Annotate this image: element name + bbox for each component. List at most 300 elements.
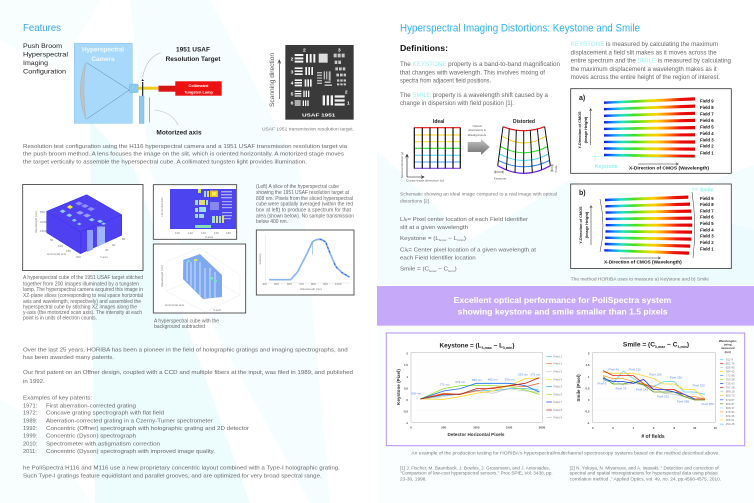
colour rows bbox=[414, 128, 460, 168]
legend header bbox=[719, 339, 737, 354]
legend rows: 475.84 bbox=[726, 410, 735, 414]
legend rows: 253.45 bbox=[726, 422, 735, 426]
text: HORIBA history: Our first patent on an Offner design, coupled with a CCD and multiple fibers at the input, was filed in 1989, and published bbox=[23, 370, 353, 376]
text: slice description: showing the 1951 USAF resolution target at bbox=[256, 190, 350, 196]
cube axis labels: 100 bbox=[58, 244, 63, 248]
keystone label: Keystone bbox=[494, 177, 507, 181]
y axis arrow bbox=[590, 108, 592, 145]
text: cube description: point is in units of electron counts. bbox=[23, 316, 97, 322]
diagram: distorted grid bbox=[494, 119, 558, 181]
reference 1: "Comparison of low-cost hyperspectral sensors," Proc SPIE, Vol. 3438, pp. bbox=[400, 471, 553, 476]
legend: Field 7 bbox=[554, 400, 563, 404]
text: smile formula: Cλᵢ= Center pixel location of a given wavelength at bbox=[400, 248, 536, 254]
text: PoliSpectra gratings: Such Type-I gratings feature equidistant and parallel grooves, and are optimized for very broad spectral range. bbox=[23, 473, 322, 479]
heading: push broom configuration bbox=[23, 43, 68, 75]
field labels: Field 1 bbox=[700, 246, 714, 251]
chart title: Keystone = (L bbox=[439, 342, 482, 350]
y ticks: 0 bbox=[406, 398, 408, 402]
legend rows: 753.58 bbox=[726, 378, 735, 382]
legend: Field 3 bbox=[554, 370, 563, 374]
y axis label bbox=[578, 111, 588, 149]
heading: push broom configuration: Hyperspectral bbox=[23, 52, 68, 59]
panel: hyperspectral cube bbox=[23, 184, 143, 270]
y ticks: 1 bbox=[588, 375, 590, 379]
lamp box bbox=[175, 81, 222, 96]
axis labels: 700 bbox=[299, 282, 304, 286]
legend rows: 826.45 bbox=[726, 365, 735, 369]
lens bbox=[129, 84, 138, 93]
y ticks: 1 bbox=[406, 375, 408, 379]
legend header: measured bbox=[721, 346, 735, 350]
text: slice description bbox=[256, 184, 354, 225]
motion arrow bbox=[148, 98, 150, 122]
text: HORIBA history: Over the last 25 years, HORIBA has been a pioneer in the field of holographic gratings and imaging spectrographs, and bbox=[23, 347, 348, 353]
diagram: distorted grid: Distorted bbox=[513, 119, 535, 125]
text: cube description: A hyperspectral cube of the 1951 USAF target stitched bbox=[23, 275, 143, 281]
y ticks: -1 bbox=[587, 421, 590, 425]
banner: showing keystone and smile smaller than 1.5 pixels bbox=[458, 307, 668, 317]
text: resolution test configuration: Resolution test configuration using the H116 hyperspectral camera and a 1951 USAF transmission resolution target via bbox=[23, 144, 348, 150]
field labels: Field 3 bbox=[700, 234, 714, 239]
text: smile formula: λmax bbox=[429, 269, 437, 273]
text: HORIBA history bbox=[23, 347, 353, 385]
text: smile formula: λmin bbox=[448, 269, 455, 273]
axis labels: 500 bbox=[274, 282, 279, 286]
axis labels: 800 bbox=[311, 282, 316, 286]
plot lines: Pixel 215 bbox=[657, 394, 669, 398]
cube side columns bbox=[87, 230, 93, 252]
legend rows: 912.9 bbox=[726, 357, 733, 361]
plot lines: 295 nm bbox=[518, 373, 528, 377]
image: USAF 1951 target: 2 bbox=[303, 48, 306, 54]
list: key patents: Concentric (Offner) spectrograph with holographic grating and 2D detector bbox=[46, 426, 249, 432]
reference 1: 23-30, 1998. bbox=[400, 476, 427, 481]
slice axes: 140 bbox=[201, 231, 206, 235]
label: motorized axis: Motorized axis bbox=[156, 130, 202, 136]
y ticks: 2 bbox=[588, 352, 590, 356]
legend: Field 9 bbox=[554, 415, 563, 419]
axis labels: X-axis bbox=[213, 308, 222, 312]
legend header: being bbox=[724, 342, 732, 346]
arrow: aberrations: Misalignments bbox=[468, 133, 487, 137]
legend rows: 650.72 bbox=[726, 394, 735, 398]
text: keystone definition: that changes with wavelength. This involves mixing of bbox=[400, 69, 545, 76]
slice image bbox=[170, 189, 236, 229]
caption: production testing: An example of the production testing for HORIBA's hyperspectral/multichannel spectroscopy systems based on the method described above. bbox=[411, 450, 720, 456]
plot lines: Pixel 180 bbox=[649, 373, 662, 377]
slice axes bbox=[160, 197, 231, 239]
y ticks: -0.5 bbox=[403, 410, 408, 414]
cube side column 2 bbox=[97, 226, 105, 247]
text: slice description: area (shown below). No sample transmission bbox=[256, 213, 354, 219]
field labels: Field 2 bbox=[700, 240, 714, 245]
y axis title: Smile (Pixel) bbox=[576, 374, 581, 402]
collimated beam bbox=[138, 87, 159, 90]
cube axis labels: 80 bbox=[122, 237, 126, 241]
image: USAF 1951 target: 4 bbox=[291, 81, 294, 87]
text: keystone formula: ) bbox=[464, 236, 466, 242]
camera label bbox=[82, 46, 124, 63]
y axis arrow bbox=[590, 206, 592, 245]
y ticks bbox=[585, 352, 590, 425]
chart title: ) bbox=[512, 342, 515, 350]
heading: Features: Features bbox=[23, 22, 61, 34]
reference 2: [2] N. Yokoya, N. Miyamura, and A. Iwasaki, " Detection and correction of bbox=[570, 465, 719, 470]
panel: test results bbox=[386, 333, 745, 446]
image: USAF 1951 target: 2 bbox=[291, 57, 294, 63]
text: cube description bbox=[23, 275, 143, 322]
legend rows: 707.28 bbox=[726, 386, 735, 390]
text: slice description: below 400 nm. bbox=[256, 219, 288, 225]
field labels: Field 7 bbox=[700, 111, 714, 116]
grid columns bbox=[414, 128, 460, 168]
x ticks: 10 bbox=[693, 426, 697, 430]
legend: Field 4 bbox=[554, 377, 563, 381]
x axis title: Detector Horizontal Pixels bbox=[448, 432, 505, 437]
x ticks: 8 bbox=[673, 426, 675, 430]
text: cube description: y-axis (the motorized scan axis). The intensity at each bbox=[23, 310, 142, 316]
arrow: aberrations: Optical bbox=[472, 124, 482, 128]
x ticks: 1500 bbox=[506, 426, 513, 430]
field labels: Field 3 bbox=[700, 137, 714, 142]
text: resolution test configuration bbox=[23, 144, 348, 165]
text: keystone definition bbox=[400, 61, 560, 85]
field labels: Field 4 bbox=[700, 131, 714, 136]
icon: spectral and cross-track axes: Spectral direction (y) bbox=[400, 152, 404, 178]
slice axes: X-axis bbox=[205, 235, 214, 239]
motorized stage bbox=[139, 96, 144, 124]
text: resolution test configuration: the target vertically to assemble the hyperspectral cube. A collimated tungsten light provides illumination. bbox=[23, 159, 307, 165]
banner: Excellent optical performance for PoliSpectra system bbox=[454, 295, 671, 305]
plot lines: 485 nm bbox=[488, 377, 498, 381]
text: smile definition: change in dispersion with field position [1]. bbox=[400, 100, 514, 107]
cube axis labels: 1000 bbox=[40, 220, 47, 224]
slice features bbox=[195, 189, 232, 228]
image: USAF 1951 target: 5 bbox=[291, 91, 294, 97]
reference 2 bbox=[570, 465, 721, 481]
camera label: Hyperspectral bbox=[82, 46, 124, 54]
cube axis labels: Y-axis bbox=[100, 255, 108, 259]
text: measurement method: displacement a field slit makes as it moves across the bbox=[571, 49, 717, 56]
field labels: Field 1 bbox=[700, 150, 714, 155]
panel: cube slice bbox=[153, 185, 237, 239]
y ticks: 0 bbox=[588, 398, 590, 402]
caption: background subtracted: A hyperspectral cube with the bbox=[154, 318, 219, 324]
smile marker bbox=[692, 187, 698, 191]
y axis label: (Image Height) bbox=[585, 211, 589, 238]
x ticks: 12 bbox=[714, 426, 717, 430]
scanning direction bbox=[270, 53, 281, 107]
colour curves bbox=[498, 127, 550, 173]
keystone marker bbox=[592, 153, 696, 161]
reference 1: [1] J. Fischer, M. Baumback, J. Bowles, J. Grossmann, and J. Antoniades, bbox=[400, 465, 550, 470]
axis labels: 1000 bbox=[335, 282, 342, 286]
text: keystone formula: Lλᵢ= Pixel center location of each Field Identifier bbox=[400, 217, 528, 223]
leader lines bbox=[143, 53, 178, 125]
plot lines bbox=[593, 353, 715, 422]
list: key patents: Spectrometer with astigmatism correction bbox=[46, 441, 160, 447]
x ticks: 4 bbox=[632, 426, 634, 430]
plot lines: Pixel 110 bbox=[629, 368, 641, 372]
icon: spectral and cross-track axes: Cross-track direction (x) bbox=[406, 178, 444, 182]
text: smile formula: each Field Identifier location bbox=[400, 255, 476, 261]
x ticks: 1000 bbox=[473, 426, 480, 430]
bar gaps bbox=[187, 260, 215, 298]
y ticks: 0.5 bbox=[404, 386, 408, 390]
text: PoliSpectra gratings bbox=[23, 465, 340, 479]
cube axis labels: 40 bbox=[105, 248, 109, 252]
field labels: Field 8 bbox=[700, 105, 714, 110]
legend rows bbox=[720, 357, 735, 426]
caption: schematic: Schematic showing an ideal image compared to a real image with optical bbox=[400, 192, 557, 197]
text: smile definition: The SMILE property is a wavelength shift caused by a bbox=[400, 92, 549, 99]
field labels: Field 5 bbox=[700, 124, 714, 129]
heading: push broom configuration: Configuration bbox=[23, 68, 67, 75]
text: measurement method: moves across the entire height of the region of interest. bbox=[571, 74, 720, 81]
text: resolution test configuration: the push broom method. A lens focuses the image on the slit, which is oriented horizontally. A motorized stage moves bbox=[23, 152, 344, 158]
text: cube description: hyperspectral cube by stitching XZ images along the bbox=[23, 305, 137, 311]
label: 1951 USAF target: 1951 USAF bbox=[176, 46, 210, 54]
chart: keystone bbox=[396, 342, 563, 437]
list: key patents bbox=[23, 395, 249, 455]
plot lines: Pixel 320 bbox=[692, 383, 705, 387]
text: keystone formula bbox=[400, 217, 528, 242]
legend header: Wavelengths bbox=[719, 339, 737, 343]
y ticks: 2 bbox=[406, 352, 408, 356]
x ticks: 0 bbox=[592, 426, 594, 430]
lamp tube bbox=[158, 86, 176, 92]
x ticks: 2000 bbox=[539, 426, 546, 430]
x ticks bbox=[410, 426, 546, 430]
y ticks: -0.5 bbox=[585, 410, 590, 414]
x ticks bbox=[592, 426, 717, 430]
text: measurement method: KEYSTONE is measured by calculating the maximum bbox=[571, 41, 718, 48]
chart title: − L bbox=[492, 342, 503, 350]
legend: Field 2 bbox=[554, 362, 563, 366]
panel: a) keystone bands: a) bbox=[579, 95, 585, 102]
legend bbox=[546, 355, 563, 419]
lamp label: Tungsten Lamp bbox=[184, 90, 213, 94]
cube axis labels: 150 bbox=[66, 249, 71, 253]
x ticks: 0 bbox=[410, 426, 412, 430]
slice axes: 160 bbox=[214, 231, 219, 235]
caption: background subtracted bbox=[154, 318, 219, 330]
x axis label: X-Direction of CMOS (Wavelength) bbox=[604, 259, 682, 264]
slit target bbox=[142, 82, 144, 96]
panel: b) smile bands bbox=[571, 184, 731, 268]
text: smile formula: Smile = (C bbox=[400, 267, 428, 273]
camera body bbox=[74, 43, 132, 123]
x axis title: # of fields bbox=[641, 434, 665, 440]
legend rows: 784.42 bbox=[726, 369, 735, 373]
axis labels: 900 bbox=[323, 282, 328, 286]
chart title: λ,min bbox=[677, 345, 687, 349]
image: USAF 1951 target: 3 bbox=[338, 48, 341, 54]
list: key patents: 1972: bbox=[23, 411, 38, 417]
list: key patents: Aberration-corrected grating in a Czerny-Turner spectrometer bbox=[46, 418, 213, 424]
axis labels: Wavelength (nm) bbox=[160, 265, 164, 287]
field labels: Field 8 bbox=[700, 202, 714, 207]
text: smile definition bbox=[400, 92, 549, 107]
heading: push broom configuration: Imaging bbox=[23, 60, 48, 67]
caption: background subtracted: background subtracted bbox=[154, 324, 205, 330]
cube axis labels: 500 bbox=[40, 210, 45, 214]
chart: smile bbox=[576, 339, 737, 440]
x ticks: 2 bbox=[612, 426, 614, 430]
list: key patents: 1999: bbox=[23, 434, 38, 440]
slice axes: Horizontal axis bbox=[160, 197, 164, 216]
text: measurement method: entire spectrum and the SMILE is measured by calculating bbox=[571, 58, 731, 64]
text: keystone definition: The KEYSTONE property is a band-to-band magnification bbox=[400, 61, 560, 68]
target pointer bbox=[141, 79, 144, 81]
y axis label: Y-Direction of CMOS bbox=[579, 206, 583, 244]
list: key patents: First aberration-corrected grating bbox=[46, 403, 136, 409]
axis labels: 400 bbox=[262, 282, 267, 286]
legend rows: 579.87 bbox=[726, 398, 735, 402]
field labels: Field 4 bbox=[700, 227, 714, 232]
y ticks: 1.5 bbox=[585, 363, 590, 367]
slice axes: 100 bbox=[175, 231, 180, 235]
text: keystone formula: λmin bbox=[457, 238, 464, 242]
x axis arrow bbox=[638, 163, 678, 165]
reference 2: correlation method ," Applied Optics, vol. 49, no. 24, pp.4568-4575, 2010. bbox=[570, 476, 721, 481]
cube axis labels bbox=[34, 210, 126, 259]
legend rows: 365.01 bbox=[726, 418, 735, 422]
legend rows: 560.87 bbox=[726, 402, 735, 406]
bar highlights bbox=[187, 259, 217, 282]
legend rows: 735.63 bbox=[726, 382, 735, 386]
arrow: aberrations: Aberrations & bbox=[468, 128, 486, 132]
text: slice description: (Left) A slice of the hyperspectral cube bbox=[256, 184, 339, 190]
plot lines: Pixel 250 bbox=[670, 376, 682, 380]
text: slice description: box at left) to produce a spectrum for that bbox=[256, 207, 352, 213]
plot lines: 580 nm bbox=[472, 378, 482, 382]
x ticks: 500 bbox=[441, 426, 447, 430]
panel: a) keystone bands bbox=[571, 89, 731, 173]
legend rows: 852.74 bbox=[726, 361, 735, 365]
field labels: Field 5 bbox=[700, 221, 714, 226]
plot lines: Pixel 75 bbox=[616, 387, 627, 391]
image: USAF 1951 target: USAF 1951 bbox=[302, 113, 336, 118]
light cone bbox=[87, 63, 129, 119]
text: HORIBA history: in 1992. bbox=[23, 379, 45, 385]
legend: Field 1 bbox=[554, 355, 563, 359]
legend rows: 772.96 bbox=[726, 374, 735, 378]
text: keystone formula: − L bbox=[447, 236, 458, 242]
image: USAF 1951 target bbox=[285, 45, 354, 120]
banner bbox=[377, 286, 754, 326]
caption: method: The method HORIBA uses to measure a) Keystone and b) Smile bbox=[571, 277, 710, 282]
y axis label: Y-Direction of CMOS bbox=[578, 111, 582, 149]
list: key patents: Examples of key patents: bbox=[23, 395, 92, 401]
plot lines: Pixel 5 bbox=[597, 381, 607, 385]
scanning direction: Scanning direction bbox=[270, 53, 276, 107]
legend: Field 5 bbox=[554, 385, 563, 389]
list: key patents: Concave grating spectrograph with flat field bbox=[46, 411, 164, 417]
smile label: Smile bbox=[700, 188, 714, 194]
text: HORIBA history: has been awarded many patents. bbox=[23, 355, 114, 361]
lamp label bbox=[184, 83, 213, 94]
text: smile formula: − C bbox=[437, 267, 449, 273]
panel: background subtracted cube bbox=[153, 244, 246, 313]
field labels bbox=[700, 196, 714, 251]
spectral bands bbox=[604, 97, 695, 158]
text: keystone formula: slit at a given wavelength bbox=[400, 225, 468, 231]
label: 1951 USAF target: Resolution Target bbox=[166, 56, 221, 63]
label: 1951 USAF target bbox=[166, 46, 221, 63]
text: keystone formula: λmax bbox=[439, 238, 447, 242]
x axis arrow bbox=[620, 257, 660, 259]
bars bbox=[183, 254, 222, 299]
y ticks: 1.5 bbox=[404, 363, 408, 367]
legend rows: 508.37 bbox=[726, 406, 735, 410]
axis labels bbox=[160, 265, 222, 312]
text: measurement method: the maximum displacement a wavelength makes as it bbox=[571, 66, 717, 73]
axis labels: Horizontal axis bbox=[165, 303, 185, 307]
list: key patents: 1971: bbox=[23, 403, 38, 409]
panel: b) smile bands: b) bbox=[579, 190, 586, 197]
frame lines bbox=[166, 248, 240, 312]
axis labels: 600 bbox=[287, 282, 292, 286]
plot lines: 275 nm bbox=[530, 372, 541, 376]
text: slice description: 808 nm. Pixels from the sliced hyperspectral bbox=[256, 196, 353, 202]
x axis label: X-Direction of CMOS (Wavelength) bbox=[629, 165, 710, 170]
plot lines: 900 nm bbox=[411, 391, 422, 395]
legend rows: 404.66 bbox=[726, 414, 735, 418]
plot lines: Pixel 40 bbox=[608, 367, 619, 371]
heading: push broom configuration: Push Broom bbox=[23, 43, 62, 50]
plot lines: 675 nm bbox=[455, 380, 466, 384]
list: key patents: Concentric (Dyson) spectrograph bbox=[46, 434, 136, 440]
legend header: (nm) bbox=[725, 350, 731, 354]
x ticks: 6 bbox=[653, 426, 655, 430]
chart title: λ,max bbox=[482, 346, 492, 350]
list: key patents: Concentric (Dyson) spectrograph with improved image quality. bbox=[46, 449, 215, 455]
caption: USAF: USAF 1951 transmission resolution target. bbox=[262, 127, 354, 132]
chart title: λ,max bbox=[655, 345, 665, 349]
caption: schematic bbox=[400, 192, 557, 203]
plot lines: 771 nm bbox=[440, 383, 450, 387]
y axis label: (Image Height) bbox=[584, 116, 588, 143]
text: smile formula bbox=[400, 248, 536, 273]
camera label: Camera bbox=[91, 56, 115, 63]
y ticks: 0.5 bbox=[585, 386, 590, 390]
plot lines: Pixel 355 bbox=[701, 402, 714, 406]
y ticks: -1 bbox=[405, 421, 408, 425]
image: USAF 1951 target: 2 bbox=[345, 90, 348, 96]
cube axis labels: 60 bbox=[112, 243, 116, 247]
field labels: Field 2 bbox=[700, 144, 714, 149]
axis labels: Intensity bbox=[258, 253, 262, 264]
cube axis labels: 50 bbox=[50, 238, 54, 242]
smile marker bbox=[550, 165, 554, 171]
panel: spectrum chart bbox=[256, 230, 354, 295]
text: cube description: together from 200 images illuminated by a tungsten bbox=[23, 281, 139, 287]
smile label: Smile bbox=[554, 165, 558, 172]
curved fits bbox=[600, 192, 695, 258]
plot lines: 390 nm bbox=[505, 377, 515, 381]
text: cube description: axis and wavelength, respectively) and assembled the bbox=[23, 299, 141, 305]
text: measurement method bbox=[571, 41, 731, 81]
caption: schematic: distortions [2] bbox=[400, 198, 429, 203]
text: smile formula: ) bbox=[455, 267, 457, 273]
slice axes: 120 bbox=[188, 231, 193, 235]
field labels bbox=[700, 98, 714, 155]
image: USAF 1951 target: 3 bbox=[291, 69, 294, 75]
list: key patents: 1989: bbox=[23, 418, 38, 424]
field labels: Field 6 bbox=[700, 215, 714, 220]
field labels: Field 9 bbox=[700, 98, 714, 103]
